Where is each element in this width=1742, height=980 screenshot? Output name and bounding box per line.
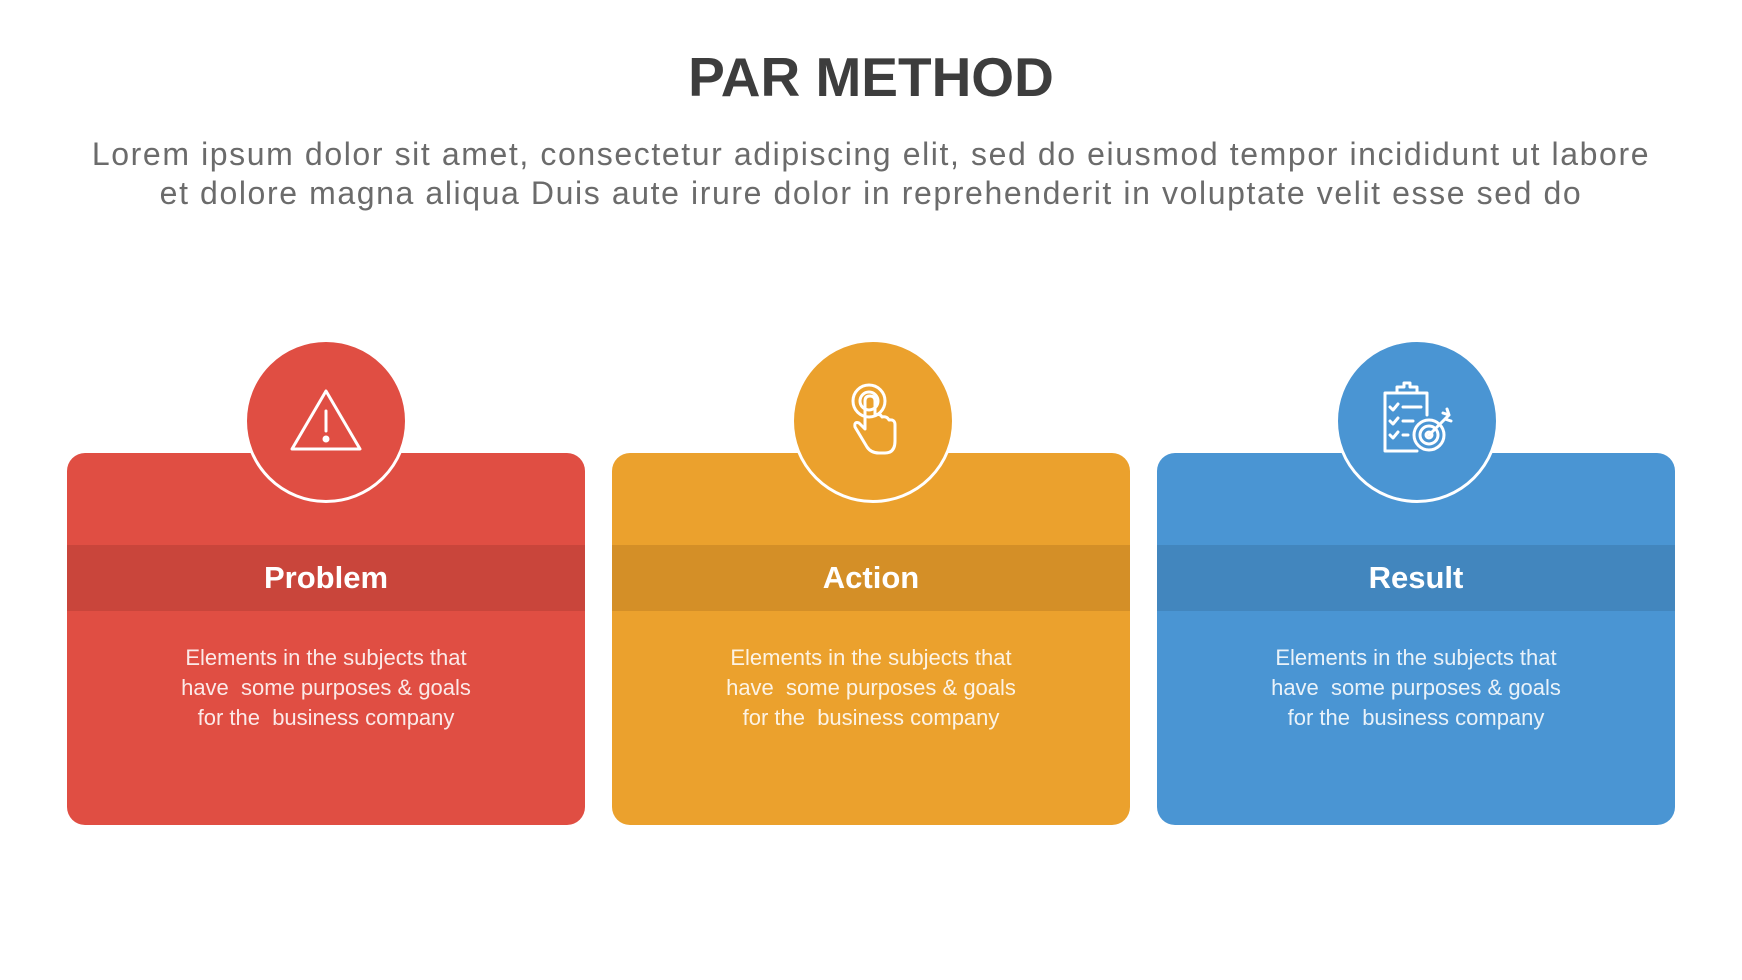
panel: problem bbox=[67, 453, 585, 825]
icon: touch bbox=[791, 339, 955, 503]
text: problem: Elements in the subjects that bbox=[185, 645, 467, 670]
text: result: Elements in the subjects that bbox=[1275, 645, 1557, 670]
text: action: have some purposes & goals bbox=[726, 675, 1016, 700]
text: result: have some purposes & goals bbox=[1271, 675, 1561, 700]
text: result bbox=[1271, 645, 1561, 730]
title: PAR METHOD bbox=[688, 46, 1054, 108]
text: action: Elements in the subjects that bbox=[730, 645, 1012, 670]
text: result: for the business company bbox=[1288, 705, 1544, 730]
heading: action: Action bbox=[823, 560, 919, 595]
icon: warning bbox=[244, 339, 408, 503]
subtitle bbox=[92, 136, 1650, 211]
heading: problem: Problem bbox=[264, 560, 388, 595]
heading: problem bbox=[67, 545, 585, 611]
heading: result: Result bbox=[1369, 560, 1463, 595]
panel: action bbox=[612, 453, 1130, 825]
icon: clipboard target bbox=[1335, 339, 1499, 503]
text: problem: for the business company bbox=[198, 705, 454, 730]
subtitle: Lorem ipsum dolor sit amet, consectetur adipiscing elit, sed do eiusmod tempor incididunt ut labore bbox=[92, 136, 1650, 172]
heading: action bbox=[612, 545, 1130, 611]
subtitle: et dolore magna aliqua Duis aute irure dolor in reprehenderit in voluptate velit esse sed do bbox=[160, 175, 1582, 211]
text: action bbox=[726, 645, 1016, 730]
heading: result bbox=[1157, 545, 1675, 611]
text: problem bbox=[181, 645, 471, 730]
text: problem: have some purposes & goals bbox=[181, 675, 471, 700]
panel: result bbox=[1157, 453, 1675, 825]
text: action: for the business company bbox=[743, 705, 999, 730]
